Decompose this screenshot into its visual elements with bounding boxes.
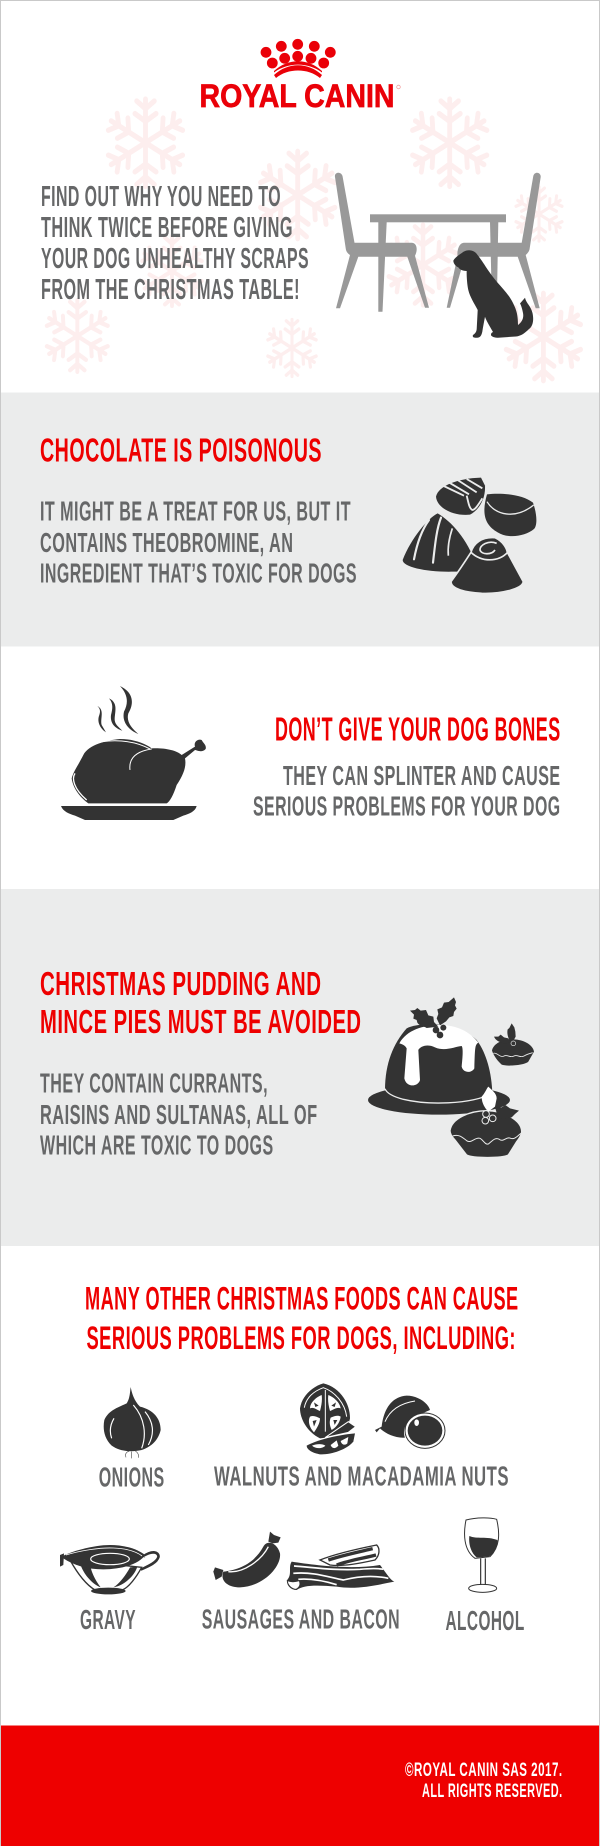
body text: THEY CONTAIN CURRANTS, — [40, 1068, 268, 1099]
body text: WHICH ARE TOXIC TO DOGS — [40, 1130, 274, 1161]
labels: gravy, sausages, alcohol: GRAVY — [80, 1604, 136, 1635]
icon: onion — [104, 1387, 161, 1458]
icon: macadamia — [375, 1396, 445, 1448]
body text: RAISINS AND SULTANAS, ALL OF — [40, 1099, 318, 1130]
body text: INGREDIENT THAT’S TOXIC FOR DOGS — [40, 558, 357, 589]
panel: footer — [0, 1726, 600, 1846]
copyright text — [405, 1760, 563, 1802]
heading: MINCE PIES MUST BE AVOIDED — [40, 1004, 362, 1041]
icon: walnut — [300, 1383, 356, 1454]
labels: onions and nuts — [99, 1461, 509, 1493]
labels: gravy, sausages, alcohol: ALCOHOL — [446, 1605, 525, 1636]
intro text: FROM THE CHRISTMAS TABLE! — [41, 274, 300, 306]
icon: gravy boat — [60, 1545, 158, 1594]
panel background — [0, 392, 600, 646]
labels: gravy, sausages, alcohol — [80, 1604, 525, 1636]
icon: chocolates — [403, 478, 536, 593]
panel: bones — [61, 686, 561, 822]
icon: crown — [261, 39, 336, 78]
icon: wine glass — [465, 1518, 499, 1592]
icon: sitting dog — [453, 250, 533, 338]
panel: other foods — [60, 1281, 525, 1636]
intro text — [41, 181, 309, 306]
icon: roast turkey — [61, 686, 206, 820]
body text — [40, 496, 357, 589]
panel: chocolate — [0, 392, 600, 646]
body text: CONTAINS THEOBROMINE, AN — [40, 527, 294, 558]
intro text: YOUR DOG UNHEALTHY SCRAPS — [41, 243, 309, 275]
intro text: THINK TWICE BEFORE GIVING — [41, 212, 293, 244]
intro text: FIND OUT WHY YOU NEED TO — [41, 181, 281, 213]
body text — [253, 760, 561, 822]
icon: bacon — [287, 1545, 394, 1590]
heading: CHRISTMAS PUDDING AND — [40, 966, 322, 1003]
icon: table and chairs — [335, 173, 541, 312]
icon: christmas pudding and pies — [368, 997, 534, 1157]
registered mark — [397, 85, 400, 89]
icon: sausage — [213, 1532, 281, 1587]
icon: gravy, sausage, bacon, wine — [60, 1518, 499, 1594]
panel background — [0, 889, 600, 1246]
heading — [85, 1281, 519, 1356]
logo wordmark: ROYAL CANIN — [200, 78, 394, 114]
body text — [40, 1068, 318, 1161]
panel: intro hero — [41, 39, 583, 381]
footer background — [0, 1726, 600, 1846]
body text: IT MIGHT BE A TREAT FOR US, BUT IT — [40, 496, 351, 527]
labels: onions and nuts: ONIONS — [99, 1462, 165, 1493]
heading: CHOCOLATE IS POISONOUS — [40, 432, 322, 470]
heading — [40, 966, 362, 1041]
snowflake background pattern — [45, 99, 583, 381]
labels: gravy, sausages, alcohol: SAUSAGES AND BACON — [202, 1604, 400, 1635]
panel: pudding and mince pies — [0, 889, 600, 1246]
logo: Royal Canin — [200, 39, 400, 114]
icon: onion and nuts — [104, 1383, 445, 1458]
